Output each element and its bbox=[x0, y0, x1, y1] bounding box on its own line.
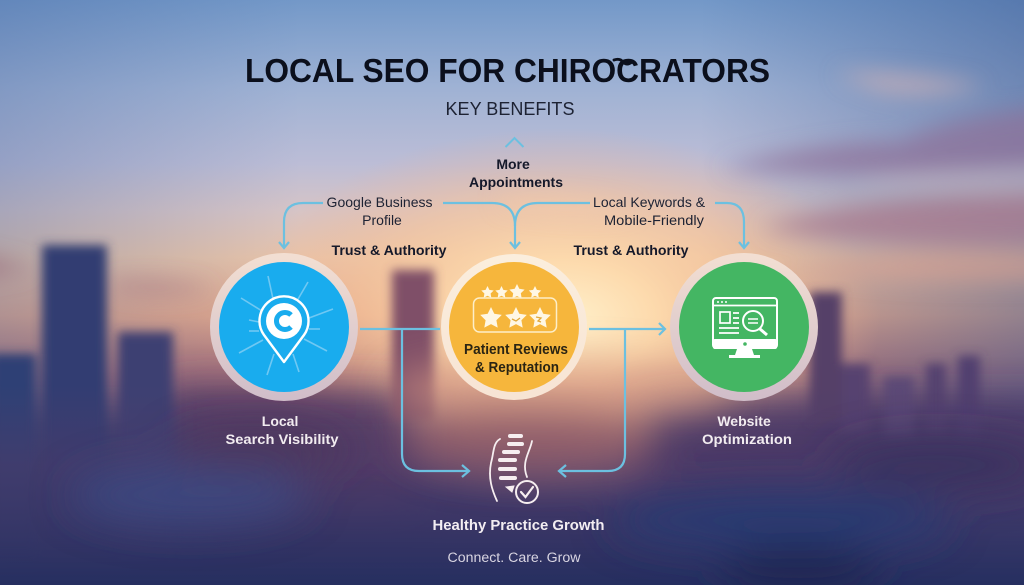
title: LOCAL SEO FOR CHIROCRATORS bbox=[245, 52, 770, 89]
label: more appointments: Appointments bbox=[469, 174, 563, 190]
arrow: google business to local search bbox=[279, 203, 323, 248]
arrow: local keywords to website bbox=[715, 203, 749, 248]
label: patient reviews and reputation: Patient Reviews bbox=[464, 342, 568, 358]
label: google business profile: Google Business bbox=[327, 194, 433, 210]
subtitle: KEY BENEFITS bbox=[446, 99, 574, 119]
icon: spine with check badge bbox=[490, 436, 538, 503]
arrow: top branches to reviews bbox=[443, 203, 590, 248]
label: local search visibility: Search Visibility bbox=[226, 431, 339, 447]
label: local keywords: Mobile-Friendly bbox=[604, 212, 704, 228]
label: website optimization: Website bbox=[717, 413, 771, 429]
tagline: Connect. Care. Grow bbox=[448, 550, 581, 565]
panel: patient reviews circle bbox=[441, 254, 587, 400]
icon: rating stars bbox=[474, 284, 556, 332]
label: local keywords: Local Keywords & bbox=[593, 194, 706, 210]
label: healthy practice growth: Healthy Practice Growth bbox=[432, 518, 604, 534]
arrow: search visibility to healthy growth bbox=[360, 329, 469, 477]
icon: location pin with rays bbox=[239, 276, 333, 375]
label: google business profile: Profile bbox=[362, 212, 402, 228]
icon: monitor with magnifier bbox=[713, 298, 777, 358]
label: trust and authority right: Trust & Authority bbox=[574, 242, 689, 258]
label: website optimization: Optimization bbox=[702, 431, 792, 447]
icon: chevron up bbox=[506, 138, 524, 147]
label: patient reviews and reputation: & Reputation bbox=[475, 360, 559, 376]
label: trust and authority left: Trust & Authority bbox=[332, 242, 447, 258]
label: local search visibility: Local bbox=[262, 413, 298, 429]
panel: website optimization circle bbox=[670, 253, 818, 401]
arrow: reviews to website and growth bbox=[559, 323, 665, 477]
panel: local search visibility circle bbox=[210, 253, 358, 401]
label: more appointments: More bbox=[496, 156, 530, 172]
